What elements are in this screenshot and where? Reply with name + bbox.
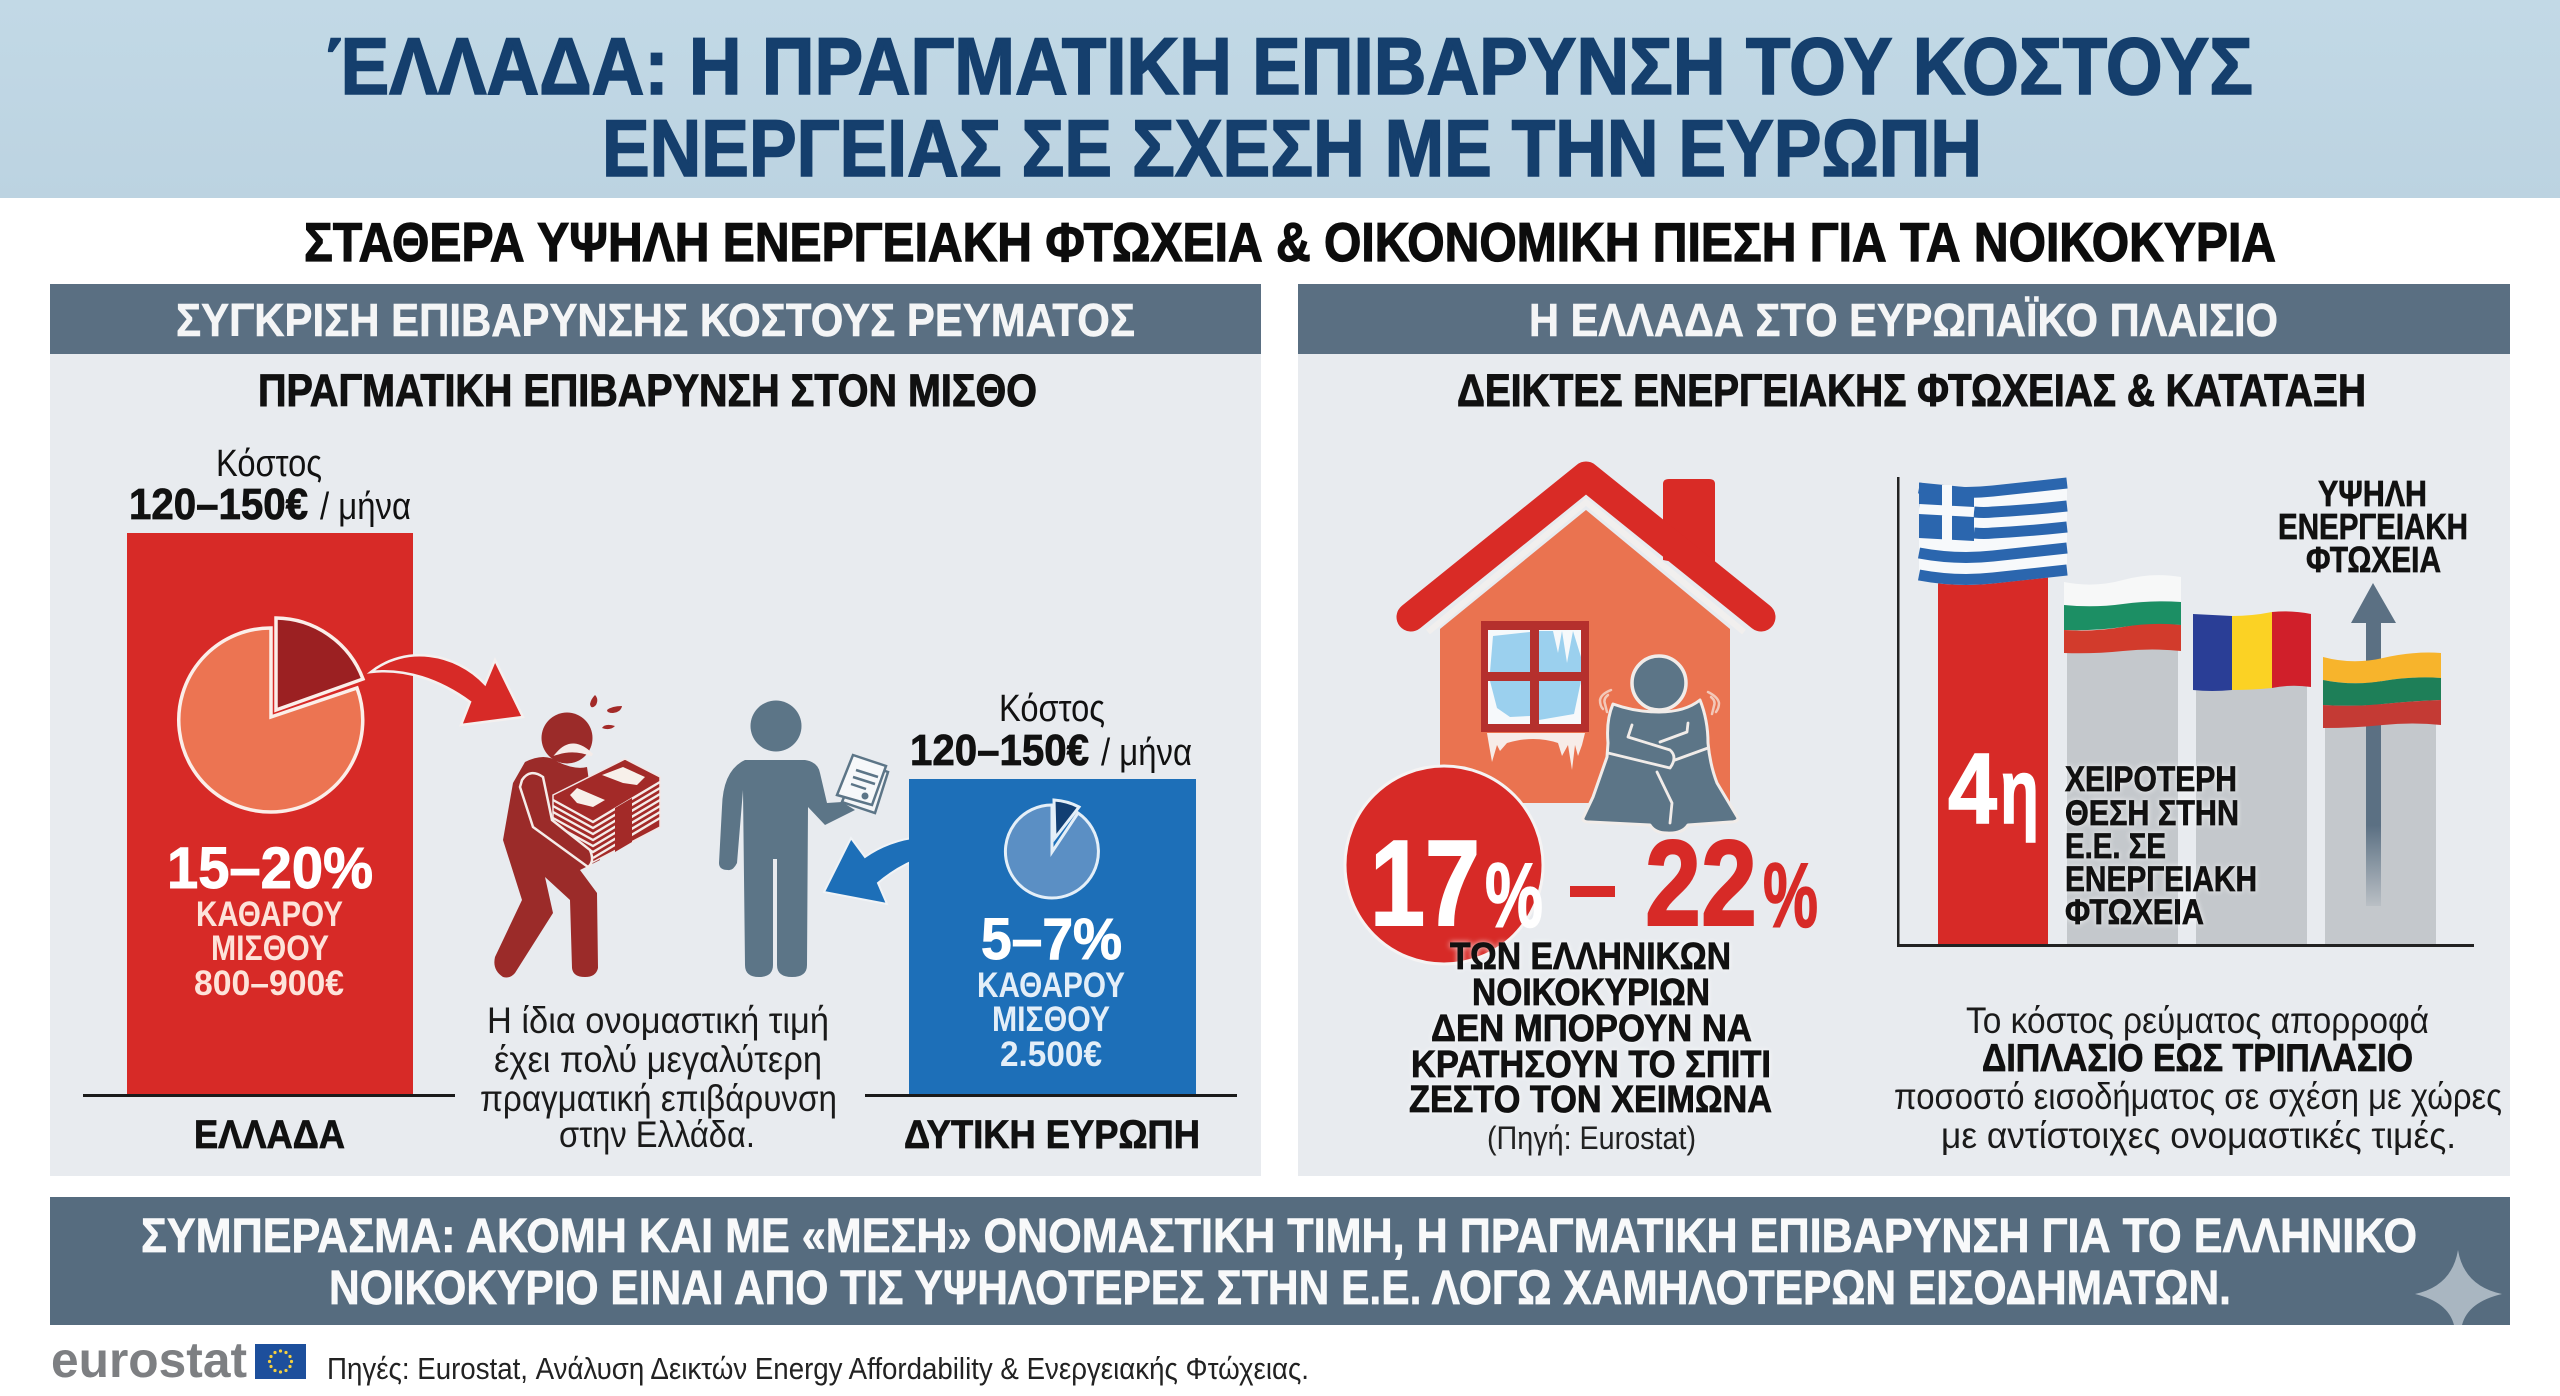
statistic: 17% to 22% of households: 17 [1370,815,1480,951]
chart: energy poverty ranking with flags [1897,473,2474,947]
bent arm [520,773,592,867]
text block: households cannot keep warm: ΝΟΙΚΟΚΥΡΙΩΝ [1472,972,1710,1014]
arrow: red [371,655,523,725]
cost label: Greece: 120–150€ [129,480,308,529]
bar label: Greece: ΕΛΛΑΔΑ [194,1113,345,1157]
rank label: 4th: 4 [1948,733,1997,845]
Greece percentage: 800–900€ [194,964,344,1003]
icon: standing person with document [719,700,888,977]
panel subheading: ΠΡΑΓΜΑΤΙΚΗ ΕΠΙΒΑΡΥΝΣΗ ΣΤΟΝ ΜΙΣΘΟ [258,365,1037,416]
text block: 4th worst position: ΘΕΣΗ ΣΤΗΝ [2065,794,2239,833]
bar label: Western Europe: ΔΥΤΙΚΗ ΕΥΡΩΠΗ [904,1113,1200,1157]
icon: person burdened by money [494,695,660,978]
text block: households cannot keep warm: ΚΡΑΤΗΣΟΥΝ ΤΟ ΣΠΙΤΙ [1411,1044,1771,1086]
header band with title [0,0,2560,198]
axis label: high energy poverty: ΦΤΩΧΕΙΑ [2306,539,2441,580]
pie chart: Greece share [179,618,363,812]
conclusion text [141,1210,2417,1315]
statistic: 17% to 22% of households [1345,766,1818,1156]
text block: cost absorbs double to triple: με αντίστοιχες ονομαστικές τιμές. [1941,1115,2456,1156]
title: ΕΝΕΡΓΕΙΑΣ ΣΕ ΣΧΕΣΗ ΜΕ ΤΗΝ ΕΥΡΩΠΗ [602,104,1982,194]
source note: (Πηγή: Eurostat) [1487,1120,1696,1156]
arrow: blue [824,837,977,904]
cost label: Greece: / μήνα [320,486,411,528]
pie chart: Western Europe share [1005,800,1098,898]
title: ΈΛΛΑΔΑ: Η ΠΡΑΓΜΑΤΙΚΗ ΕΠΙΒΑΡΥΝΣΗ ΤΟΥ ΚΟΣΤΟΥΣ [327,22,2253,112]
conclusion text: ΝΟΙΚΟΚΥΡΙΟ ΕΙΝΑΙ ΑΠΟ ΤΙΣ ΥΨΗΛΟΤΕΡΕΣ ΣΤΗΝ Ε.Ε. ΛΟΓΩ ΧΑΜΗΛΟΤΕΡΩΝ ΕΙΣΟΔΗΜΑΤΩΝ. [329,1262,2231,1315]
text block: households cannot keep warm [1409,936,1772,1121]
flag: Lithuania [2323,653,2441,728]
text block: same nominal price: Η ίδια ονομαστική τιμή [487,1000,829,1041]
axis label: high energy poverty [2278,473,2468,580]
axis label: high energy poverty: ΕΝΕΡΓΕΙΑΚΗ [2278,506,2468,547]
flag: Romania [2193,611,2311,691]
axis label: high energy poverty: ΥΨΗΛΗ [2318,473,2427,514]
panel: electricity cost burden comparison [50,284,1261,1176]
flag: Greece [1919,478,2067,585]
statistic: 17% to 22% of households: % [1485,845,1543,947]
text block: households cannot keep warm: ΤΩΝ ΕΛΛΗΝΙΚΩΝ [1450,936,1731,978]
icon: shivering seated person [1583,656,1738,833]
text block: 4th worst position: ΕΝΕΡΓΕΙΑΚΗ [2065,860,2257,899]
text block: same nominal price: έχει πολύ μεγαλύτερη [494,1039,822,1080]
cost label: Western Europe: / μήνα [1101,732,1192,774]
panel heading: Η ΕΛΛΑΔΑ ΣΤΟ ΕΥΡΩΠΑΪΚΟ ΠΛΑΙΣΙΟ [1529,294,2278,346]
text block: 4th worst position: ΧΕΙΡΟΤΕΡΗ [2065,760,2237,799]
Western Europe percentage: 2.500€ [1000,1035,1102,1074]
sources note: Πηγές: Eurostat, Ανάλυση Δεικτών Energy Affordability & Ενεργειακής Φτώχειας. [327,1351,1309,1386]
Western Europe percentage [977,907,1125,1074]
Greece percentage: ΜΙΣΘΟΥ [211,929,329,968]
money stack [553,759,660,862]
document [837,755,888,813]
text block: same nominal price: στην Ελλάδα. [559,1114,755,1155]
cost label: Greece: Κόστος [216,443,322,485]
panel: Greece in the European context [1298,284,2510,1176]
Greece percentage: ΚΑΘΑΡΟΥ [196,895,343,934]
text block: 4th worst position: Ε.Ε. ΣΕ [2065,827,2166,866]
icon: EU flag [255,1344,306,1379]
Greece percentage: 15–20% [167,836,373,901]
Western Europe percentage: ΚΑΘΑΡΟΥ [977,966,1125,1005]
text block: 4th worst position: ΦΤΩΧΕΙΑ [2065,893,2204,932]
text block: cost absorbs double to triple: Το κόστος ρεύματος απορροφά [1966,1000,2429,1041]
bar: Greece [127,533,413,1095]
eurostat logo: eurostat [51,1332,247,1388]
cost label: Western Europe [910,688,1192,775]
rank label: 4th: η [2000,741,2039,843]
statistic: 17% to 22% of households: % [1763,845,1818,947]
frozen window [1481,621,1589,770]
panel subheading: ΔΕΙΚΤΕΣ ΕΝΕΡΓΕΙΑΚΗΣ ΦΤΩΧΕΙΑΣ & ΚΑΤΑΤΑΞΗ [1457,365,2366,416]
flag: Bulgaria [2064,575,2181,653]
panel heading: ΣΥΓΚΡΙΣΗ ΕΠΙΒΑΡΥΝΣΗΣ ΚΟΣΤΟΥΣ ΡΕΥΜΑΤΟΣ [176,294,1135,346]
cost label: Western Europe: 120–150€ [910,726,1089,775]
cost label: Greece [129,443,411,529]
text block: households cannot keep warm: ΔΕΝ ΜΠΟΡΟΥΝ ΝΑ [1431,1008,1752,1050]
subtitle: ΣΤΑΘΕΡΑ ΥΨΗΛΗ ΕΝΕΡΓΕΙΑΚΗ ΦΤΩΧΕΙΑ & ΟΙΚΟΝΟΜΙΚΗ ΠΙΕΣΗ ΓΙΑ ΤΑ ΝΟΙΚΟΚΥΡΙΑ [304,211,2276,273]
icon: cold house [1411,476,1761,833]
text block: same nominal price: πραγματική επιβάρυνση [480,1078,837,1119]
title [327,22,2253,194]
arrow: upward high poverty [2351,583,2396,906]
text block: households cannot keep warm: ΖΕΣΤΟ ΤΟΝ ΧΕΙΜΩΝΑ [1409,1079,1772,1121]
text block: cost absorbs double to triple: ποσοστό εισοδήματος σε σχέση με χώρες [1894,1076,2502,1117]
Western Europe percentage: ΜΙΣΘΟΥ [992,1000,1110,1039]
text block: cost absorbs double to triple: ΔΙΠΛΑΣΙΟ ΕΩΣ ΤΡΙΠΛΑΣΙΟ [1982,1037,2413,1080]
statistic: 17% to 22% of households: 22 [1645,815,1757,951]
cost label: Western Europe: Κόστος [999,688,1105,730]
icon: sparkle [2415,1250,2502,1325]
Greece percentage [167,836,373,1003]
text block: cost absorbs double to triple [1894,1000,2502,1156]
conclusion band [50,1197,2510,1325]
text block: same nominal price [480,1000,837,1155]
bar: Western Europe [909,779,1196,1095]
Western Europe percentage: 5–7% [981,907,1122,972]
rank label: 4th [1948,733,2039,845]
text block: 4th worst position [2065,760,2257,932]
